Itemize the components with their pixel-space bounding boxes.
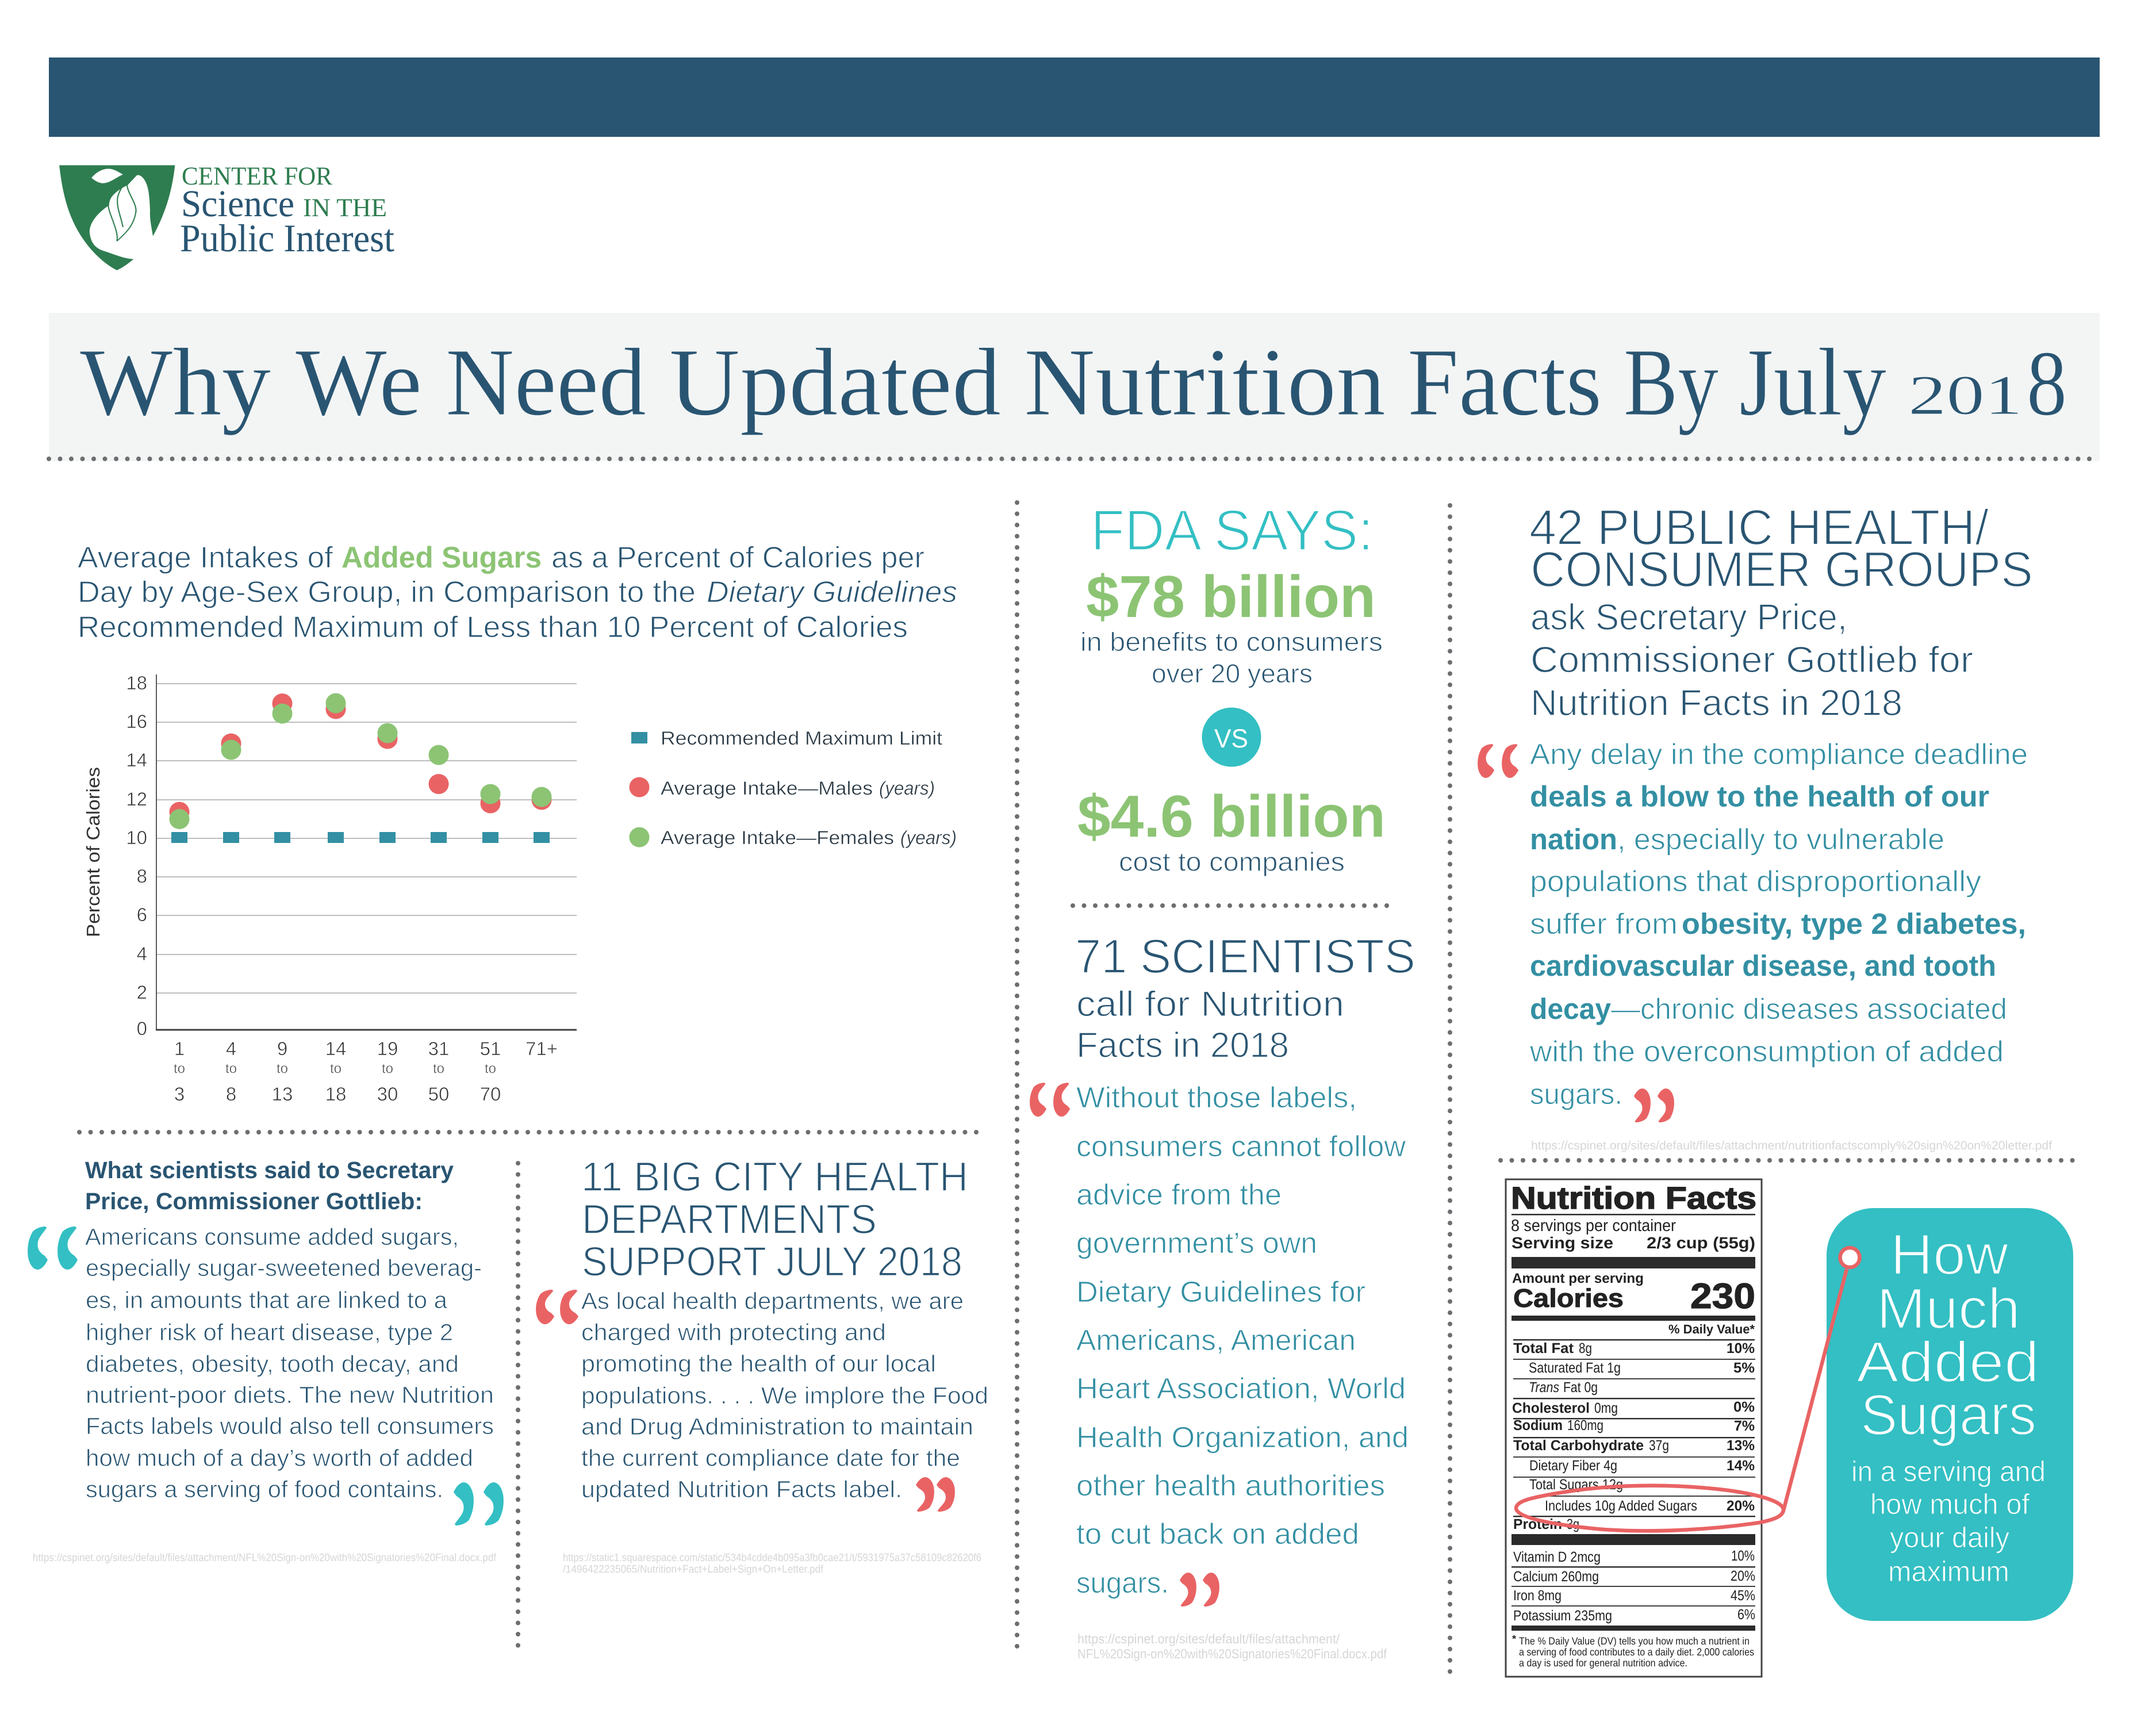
nutrition facts label: 10% [1727,1340,1755,1356]
quote text: higher risk of heart disease, type 2 [86,1319,453,1346]
x-axis age labels: 18 [325,1083,346,1105]
quote text: Americans consume added sugars, [85,1224,459,1250]
open quote mark [1030,1083,1070,1117]
nutrition facts label: a day is used for general nutrition advice. [1519,1657,1687,1669]
nutrition facts label: Calories [1513,1283,1624,1313]
y-axis tick labels: 0 [137,1018,147,1039]
quote text: Any delay in the compliance deadline [1530,738,2028,770]
quote text: , especially to vulnerable [1617,823,1944,856]
nutrition facts label: a serving of food contributes to a daily diet. 2,000 calories [1519,1646,1754,1658]
heading: Nutrition Facts in 2018 [1530,682,1902,723]
legend [629,727,957,848]
quote text [1529,738,2028,1110]
quote text: obesity, type 2 diabetes, [1682,907,2026,940]
x-axis age labels: 70 [480,1083,501,1105]
nutrition facts label: Total Carbohydrate [1513,1438,1644,1454]
quote text: Dietary Guidelines for [1076,1275,1365,1308]
icon: shield with hand and leaves [59,165,175,270]
callout description: maximum [1888,1555,2009,1588]
female intake points [169,693,552,829]
y-axis tick labels: 4 [137,943,147,964]
title: We [296,329,422,436]
x-axis age labels: 9 [277,1038,287,1059]
title: July [1739,329,1886,436]
quote text: sugars. [1530,1078,1622,1110]
quote text: and Drug Administration to maintain [581,1413,973,1440]
benefit description: over 20 years [1152,658,1313,688]
quote text: es, in amounts that are linked to a [86,1287,447,1313]
recommended maximum markers [171,832,550,843]
heading: 42 PUBLIC HEALTH/ [1529,500,1989,555]
heading [581,1154,968,1285]
nutrition facts label: Nutrition Facts [1511,1181,1756,1216]
quote text: populations that disproportionally [1530,865,1982,898]
VS badge: VS [1214,723,1248,753]
quote text: charged with protecting and [581,1319,886,1346]
nutrition facts label: 14% [1727,1458,1755,1474]
heading [85,1157,454,1214]
quote text: nutrient-poor diets. The new Nutrition [86,1382,494,1408]
nutrition facts label: 37g [1649,1438,1669,1454]
x-axis age labels [174,1038,558,1105]
callout heading: Much [1877,1276,2020,1341]
title: 8 [2027,332,2067,435]
callout heading: Sugars [1860,1383,2036,1447]
title: Facts [1407,329,1602,436]
callout description: in a serving and [1851,1455,2046,1488]
nutrition facts label: 3g [1567,1516,1579,1532]
quote text [1076,1081,1409,1599]
heading: 11 BIG CITY HEALTH [581,1154,968,1200]
quote text: sugars a serving of food contains. [86,1476,443,1502]
quote text: diabetes, obesity, tooth decay, and [86,1351,459,1377]
heading: Commissioner Gottlieb for [1530,639,1973,680]
x-axis age labels: 14 [325,1038,346,1059]
x-axis age labels: to [174,1061,185,1076]
nutrition facts label: Total Fat [1513,1340,1574,1356]
quote text: populations. . . . We implore the Food [581,1382,988,1409]
panel: FDA says [1077,498,1386,876]
panel: big city health departments [536,1154,988,1575]
quote text: the current compliance date for the [581,1444,960,1471]
logo wordmark: Science [181,183,294,225]
x-axis age labels: 71+ [525,1038,558,1059]
nutrition facts label: 45% [1731,1588,1755,1604]
close quote mark [1634,1088,1674,1122]
chart heading: Added Sugars [342,541,542,574]
source link: https://cspinet.org/sites/default/files/attachment/NFL%20Sign-on%20with%20Signatories%20Final.docx.pdf [33,1552,497,1564]
quote text: other health authorities [1076,1469,1385,1502]
benefit description: in benefits to consumers [1080,627,1383,657]
quote text: updated Nutrition Facts label. [581,1476,902,1502]
heading: Price, Commissioner Gottlieb: [85,1188,423,1214]
quote text: with the overconsumption of added [1529,1035,2004,1068]
quote text: nation [1530,823,1617,856]
open quote mark [536,1290,578,1324]
quote text: Heart Association, World [1076,1372,1406,1405]
y-axis tick labels: 16 [126,711,147,732]
quote text: how much of a day’s worth of added [86,1444,473,1471]
nutrition facts label: 0mg [1594,1400,1618,1416]
source link: https://cspinet.org/sites/default/files/attachment/nutritionfactscomply%20sign%20on%20letter.pdf [1531,1139,2052,1152]
x-axis age labels: 1 [174,1038,185,1059]
x-axis age labels: 4 [226,1038,236,1059]
x-axis age labels: to [277,1061,288,1076]
nutrition facts label: Potassium 235mg [1513,1608,1612,1624]
quote text: especially sugar-sweetened beverag- [86,1255,482,1281]
top banner [49,57,2100,137]
nutrition facts label: Trans [1529,1379,1559,1396]
arrow: highlight from added sugars row to callout [1516,1248,1859,1531]
x-axis age labels: 50 [428,1083,449,1105]
title: By [1624,329,1718,436]
y-axis tick labels: 8 [137,865,147,887]
quote text: cardiovascular disease, and tooth [1530,949,1996,982]
quote text: sugars. [1076,1566,1169,1599]
title: Nutrition [1024,329,1386,436]
nutrition facts label: 8g [1579,1340,1592,1356]
quote text: —chronic diseases associated [1611,992,2007,1025]
x-axis age labels: 51 [480,1038,501,1059]
close quote mark [1180,1573,1219,1607]
panel: what scientists said [28,1157,504,1564]
quote text: consumers cannot follow [1076,1130,1406,1163]
callout description: how much of [1870,1488,2030,1520]
open quote mark [1478,744,1518,778]
nutrition facts label: 0% [1733,1399,1755,1415]
logo: Center for Science in the Public Interest [59,162,394,270]
heading: FDA SAYS: [1091,498,1374,562]
y-axis tick labels: 18 [126,672,147,693]
title: 201 [1908,365,2023,427]
panel: 42 public health groups [1478,500,2052,1152]
nutrition facts label: 20% [1727,1498,1755,1514]
x-axis age labels: to [485,1061,496,1076]
heading: call for Nutrition [1076,984,1344,1024]
quote text: Health Organization, and [1076,1421,1409,1454]
x-axis age labels: 31 [428,1038,449,1059]
nutrition facts label: 13% [1727,1438,1755,1454]
VS badge [1202,707,1261,767]
legend: (years) [900,827,957,848]
x-axis age labels: to [330,1061,342,1076]
cost description: cost to companies [1119,846,1345,876]
legend: Average Intake—Males [661,777,873,799]
callout description: your daily [1890,1521,2009,1554]
nutrition facts label: Protein [1513,1516,1562,1532]
chart heading: Recommended Maximum of Less than 10 Percent of Calories [78,611,908,644]
nutrition facts label [1506,1179,1762,1677]
heading: ask Secretary Price, [1530,596,1847,638]
source link [1077,1631,1387,1661]
open quote mark [28,1226,78,1270]
heading: Facts in 2018 [1076,1026,1289,1065]
logo wordmark: Public Interest [180,216,394,260]
logo wordmark: CENTER FOR [182,162,332,190]
nutrition facts label: Includes 10g Added Sugars [1545,1498,1697,1514]
nutrition facts label: 160mg [1567,1417,1603,1433]
quote text: As local health departments, we are [581,1288,964,1314]
callout description [1851,1455,2046,1588]
x-axis age labels: 30 [377,1083,398,1105]
nutrition facts label: Calcium 260mg [1513,1569,1599,1585]
source link: https://static1.squarespace.com/static/534b4cdde4b095a3fb0cae21/t/5931975a37c58109c82620f6 [563,1552,981,1564]
heading: DEPARTMENTS [582,1197,877,1243]
nutrition facts label: 5% [1733,1360,1755,1376]
y-axis tick labels: 10 [126,827,147,848]
title [80,329,2067,436]
y-axis title: Percent of Calories [83,767,103,937]
quote text: promoting the health of our local [581,1351,936,1377]
title: Need [446,329,646,436]
benefit description [1080,627,1383,688]
nutrition facts label: Dietary Fiber 4g [1529,1458,1617,1474]
y-axis tick labels [126,672,147,1039]
quote text: Americans, American [1076,1324,1356,1356]
y-axis tick labels: 14 [126,749,147,770]
nutrition facts label: 7% [1734,1418,1755,1434]
source link: NFL%20Sign-on%20with%20Signatories%20Final.docx.pdf [1077,1646,1387,1661]
quote text: decay [1530,992,1612,1025]
nutrition facts label: Amount per serving [1512,1271,1644,1286]
y-axis tick labels: 6 [137,904,147,925]
heading: CONSUMER GROUPS [1530,542,2033,597]
nutrition facts label: Sodium [1513,1417,1563,1433]
quote text: Facts labels would also tell consumers [86,1413,494,1439]
heading [1529,500,2033,723]
quote text: deals a blow to the health of our [1530,780,1989,812]
logo wordmark [180,162,394,260]
x-axis age labels: to [225,1061,237,1076]
callout heading: Added [1856,1330,2039,1394]
quote text [85,1224,494,1502]
y-axis tick labels: 12 [126,788,147,810]
nutrition facts label: 20% [1731,1568,1755,1584]
benefit figure: $78 billion [1086,564,1376,630]
chart heading: Dietary Guidelines [707,576,957,609]
x-axis age labels: 13 [272,1083,293,1105]
chart heading: as a Percent of Calories per [551,541,924,574]
quote text: government’s own [1076,1226,1317,1259]
x-axis age labels: to [433,1061,444,1076]
close quote mark [916,1477,955,1512]
nutrition facts label: Vitamin D 2mcg [1513,1549,1601,1565]
source link: /1496422235065/Nutrition+Fact+Label+Sign+On+Letter.pdf [563,1563,824,1575]
nutrition facts label: 10% [1731,1548,1755,1564]
quote text: suffer from [1530,907,1678,940]
source link: https://cspinet.org/sites/default/files/attachment/ [1077,1631,1340,1646]
nutrition facts label: 230 [1690,1276,1755,1316]
source link [563,1552,981,1575]
nutrition facts label: 8 servings per container [1511,1217,1676,1235]
heading: What scientists said to Secretary [85,1157,454,1183]
x-axis age labels: to [382,1061,393,1076]
callout heading: How [1890,1222,2009,1287]
male intake points [169,693,552,822]
callout heading [1856,1222,2039,1447]
callout: how much added sugars [1827,1208,2073,1621]
title: Why [80,329,271,436]
heading [1075,929,1415,1065]
x-axis age labels: 3 [174,1083,185,1105]
nutrition facts label: 6% [1737,1607,1755,1623]
nutrition facts label: Cholesterol [1512,1400,1590,1416]
close quote mark [454,1482,504,1525]
x-axis age labels: 19 [377,1038,398,1059]
nutrition facts label: * [1512,1633,1516,1644]
nutrition facts label: Saturated Fat 1g [1529,1360,1621,1376]
logo wordmark: IN THE [303,193,387,222]
x-axis age labels: 8 [226,1083,236,1105]
cost figure: $4.6 billion [1077,783,1386,849]
nutrition facts label: Total Sugars 12g [1529,1477,1623,1493]
legend: Recommended Maximum Limit [661,727,942,749]
nutrition facts label: The % Daily Value (DV) tells you how much a nutrient in [1519,1635,1750,1647]
nutrition facts label: % Daily Value* [1668,1322,1755,1336]
nutrition facts label: Iron 8mg [1513,1588,1562,1604]
panel: 71 scientists [1030,929,1415,1661]
nutrition facts label: 2/3 cup (55g) [1647,1234,1755,1252]
chart heading: Average Intakes of [78,541,333,574]
title panel [49,313,2100,461]
heading: SUPPORT JULY 2018 [582,1239,962,1285]
chart heading [78,541,957,644]
chart heading: Day by Age-Sex Group, in Comparison to the [78,576,696,609]
legend: (years) [879,777,935,799]
chart: added sugars by age-sex group [83,672,957,1105]
heading: 71 SCIENTISTS [1075,929,1415,983]
nutrition facts label: Serving size [1511,1234,1613,1252]
quote text: to cut back on added [1076,1517,1359,1550]
quote text [581,1288,988,1502]
title: Updated [669,329,1001,436]
quote text: Without those labels, [1076,1081,1357,1114]
nutrition facts label: Fat 0g [1563,1379,1598,1396]
quote text: advice from the [1076,1178,1282,1211]
y-axis tick labels: 2 [137,982,147,1003]
legend: Average Intake—Females [661,827,894,848]
